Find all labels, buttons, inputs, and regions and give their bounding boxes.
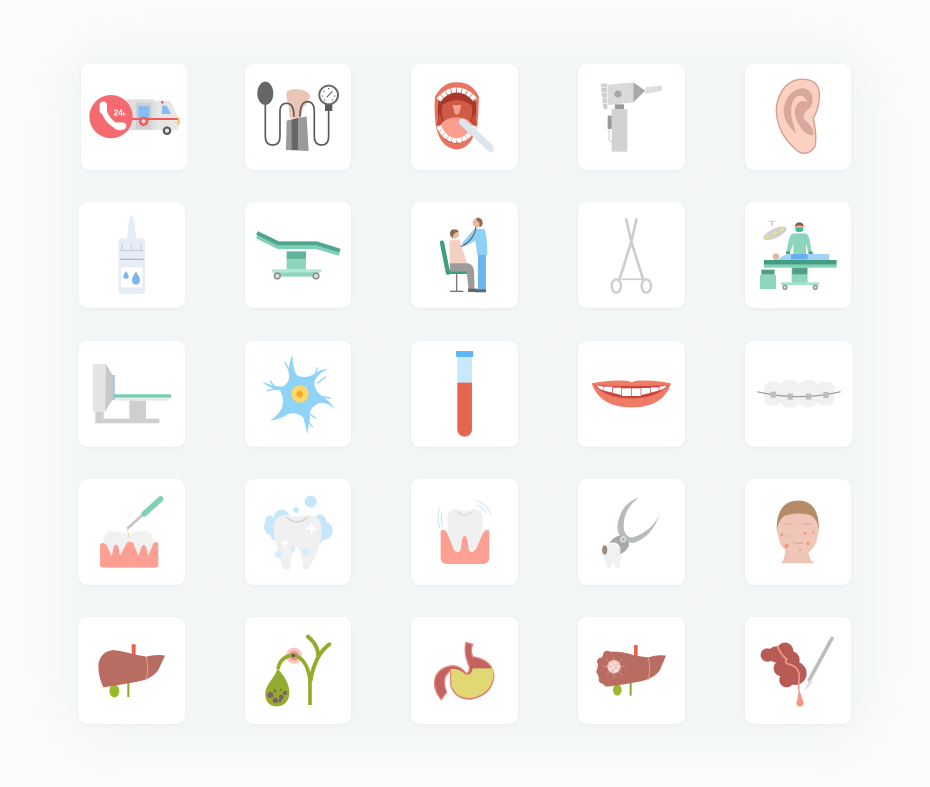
icon: MRI scanner — [93, 364, 171, 423]
card: lips — [578, 341, 685, 447]
card: surgeon — [745, 202, 851, 308]
icon: liver — [98, 644, 165, 697]
card: liver — [78, 617, 185, 724]
icon: neuron cell — [261, 354, 336, 434]
card: dental scaler — [78, 479, 185, 585]
card: gallstones — [245, 617, 351, 724]
icon: intestine and scalpel — [761, 638, 832, 707]
card: blood pressure — [245, 64, 351, 170]
icon: sphygmomanometer — [257, 82, 339, 151]
card: mouth — [411, 64, 518, 170]
card: liver tumour — [578, 617, 685, 724]
icon: surgical forceps — [612, 218, 651, 293]
card: face — [745, 479, 851, 585]
icon: 24h ambulance: 24h — [114, 108, 126, 118]
card: clean tooth — [245, 479, 351, 585]
icon: eye drops bottle — [118, 216, 145, 294]
icon: doctor and patient — [442, 218, 487, 292]
card: extraction pliers — [578, 479, 685, 585]
icon: operating table — [257, 233, 340, 280]
card: braces — [745, 341, 852, 447]
card: operating chair — [245, 202, 351, 308]
icon: dental pliers with tooth — [602, 497, 660, 568]
icon: loose tooth — [438, 501, 491, 564]
card: test tube — [411, 341, 518, 447]
card: otoscope — [578, 64, 685, 170]
card: neuron — [245, 341, 351, 447]
icon: blood test tube — [456, 351, 473, 437]
icon: tooth with foam — [264, 496, 333, 569]
icon: open mouth with tongue depressor — [435, 82, 491, 149]
icon: dental scaler on teeth — [100, 499, 161, 568]
card: doctor examination — [411, 202, 518, 308]
icon: ear — [776, 79, 819, 153]
icon: liver with tumour — [596, 645, 666, 696]
card: eye drops — [79, 202, 185, 308]
icon: smile — [592, 381, 671, 407]
icon: stomach — [434, 642, 494, 700]
icon: gallbladder with stones — [265, 637, 329, 706]
icon: otoscope — [601, 82, 662, 152]
card: ear — [745, 64, 851, 170]
card: forceps — [578, 202, 685, 308]
card: appendix surgery — [745, 617, 851, 724]
icon: dental braces — [757, 380, 841, 407]
card: ambulance — [81, 64, 188, 170]
icon: surgeon at operating table — [760, 221, 837, 290]
card: tooth ache — [411, 479, 518, 585]
icon: face with acne — [777, 501, 819, 563]
card: stomach — [411, 617, 518, 724]
card: scanner — [78, 341, 185, 447]
